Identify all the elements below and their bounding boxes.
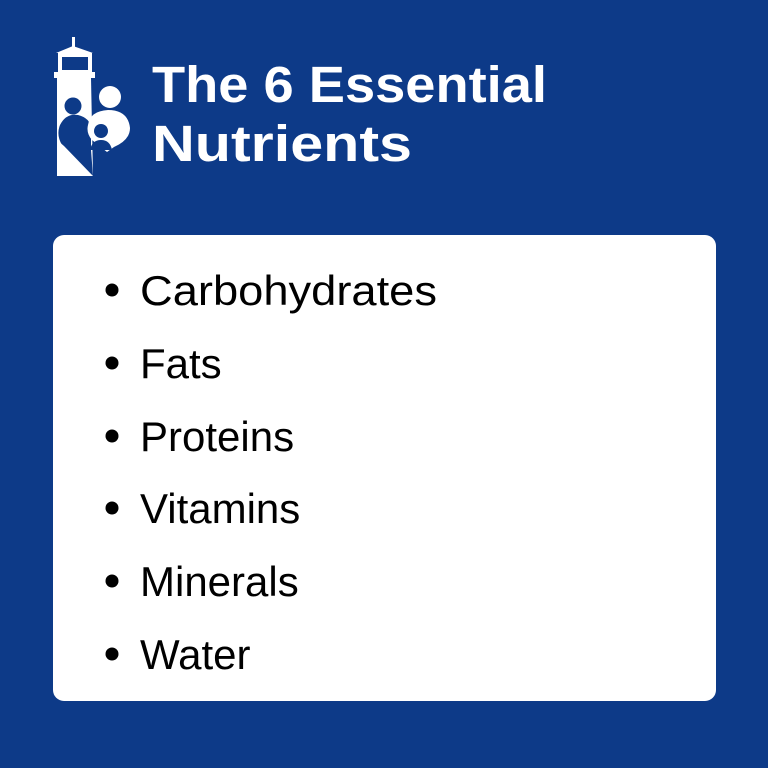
- list item: Vitamins: Vitamins: [140, 485, 300, 532]
- list item: Water: Water: [140, 631, 250, 678]
- list item: Proteins: Proteins: [140, 413, 294, 460]
- icon: lighthouse logo: [54, 37, 130, 176]
- title: The 6 Essential: [152, 56, 547, 113]
- list item: Fats: Fats: [140, 340, 222, 387]
- list item: Carbohydrates: Carbohydrates: [140, 267, 437, 314]
- title: [152, 56, 547, 172]
- title: Nutrients: [152, 115, 412, 172]
- list item: Minerals: Minerals: [140, 558, 299, 605]
- panel: nutrient list: [53, 235, 716, 701]
